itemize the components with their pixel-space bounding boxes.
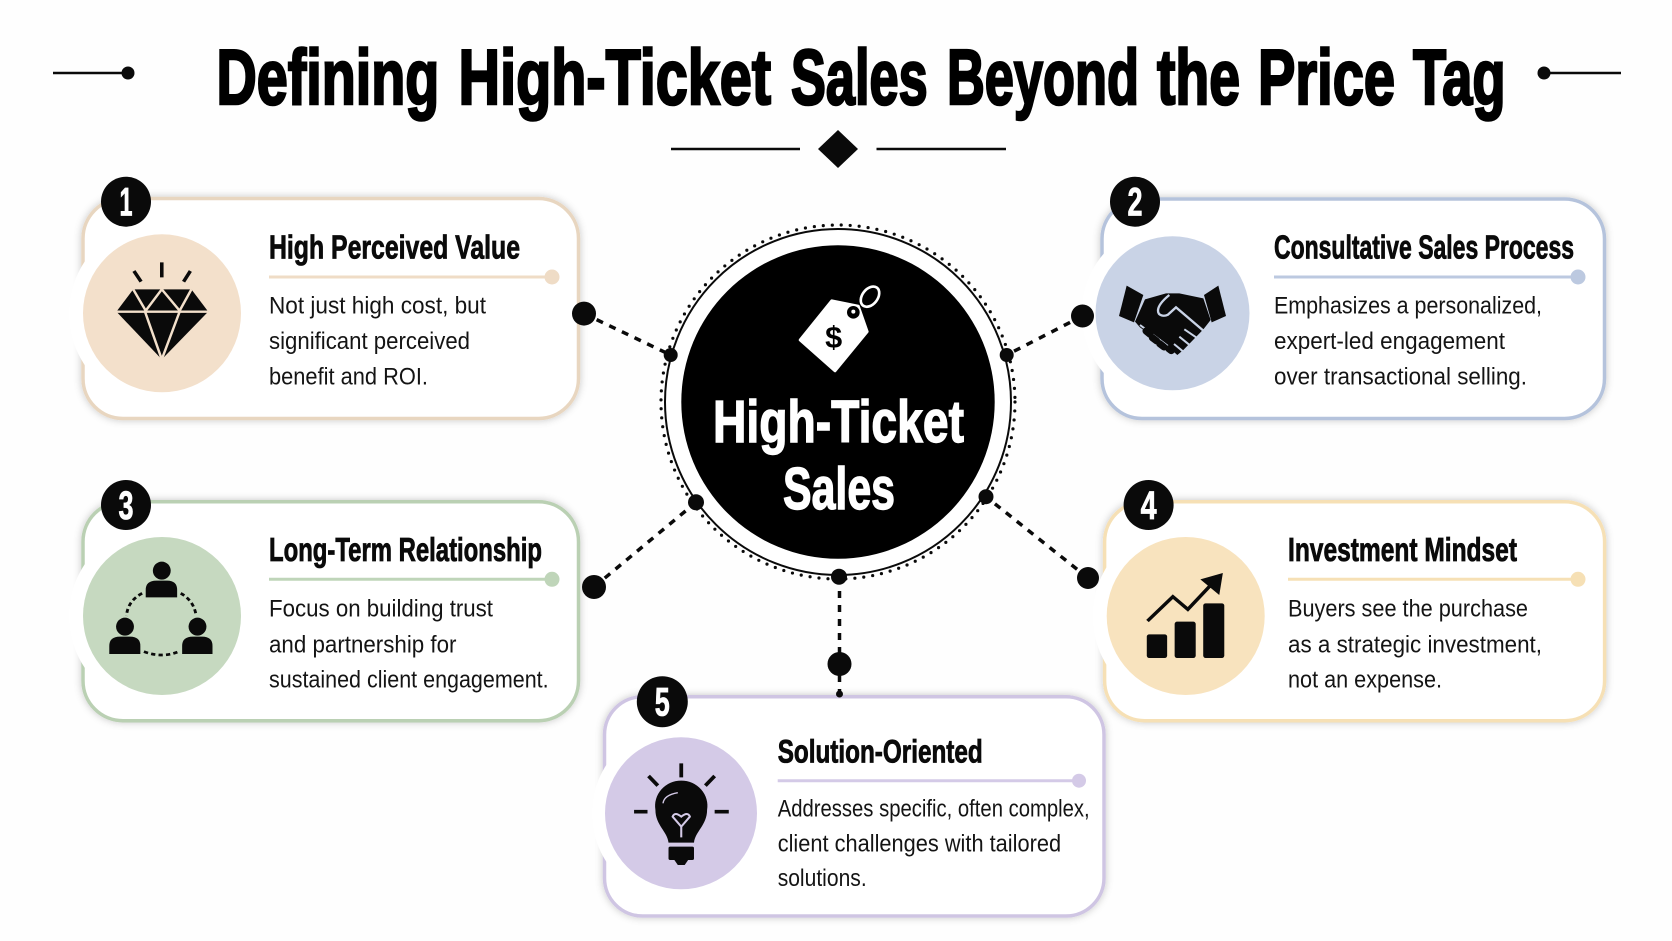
badge 3: 3: [118, 484, 134, 528]
icon: handshake: [1096, 236, 1250, 390]
text block: Addresses specific, often complex,: [778, 796, 1090, 823]
title divider with diamond: [671, 130, 1006, 168]
badge 2: 2: [1128, 180, 1142, 224]
badge 3: [101, 480, 151, 530]
text block: and partnership for: [269, 631, 456, 658]
rule: [1288, 572, 1586, 587]
connector: card 4: [986, 497, 1099, 589]
title: Defining: [216, 33, 439, 121]
text block: significant perceived: [269, 328, 470, 355]
hub label: Sales: [783, 456, 895, 522]
text block: sustained client engagement.: [269, 666, 549, 693]
connector: card 1: [572, 302, 671, 355]
hub nodes: [664, 348, 1014, 585]
text block: [1274, 292, 1542, 390]
panel: high perceived value: [69, 177, 578, 418]
text block: Buyers see the purchase: [1288, 596, 1528, 623]
title: the: [1157, 33, 1240, 121]
badge 1: 1: [120, 180, 132, 224]
badge 5: 5: [655, 681, 670, 725]
panel: solution-oriented: [592, 676, 1104, 916]
text block: solutions.: [778, 865, 867, 892]
badge 1: [101, 177, 151, 227]
badge 2: [1110, 177, 1160, 227]
title: Price: [1258, 33, 1395, 121]
icon: people network: [83, 537, 241, 695]
rule: [269, 270, 560, 284]
text block: Not just high cost, but: [269, 292, 486, 319]
rule: [778, 774, 1086, 788]
title: Sales: [791, 33, 928, 121]
hub label: High-Ticket: [713, 389, 964, 455]
text block: expert-led engagement: [1274, 328, 1505, 355]
heading: Long-Term Relationship: [269, 531, 542, 568]
badge 4: 4: [1141, 484, 1157, 528]
title: Tag: [1413, 33, 1506, 121]
center hub: [661, 225, 1015, 585]
connector: card 2: [1007, 304, 1094, 355]
heading: Solution-Oriented: [778, 734, 983, 770]
heading: High Perceived Value: [269, 228, 520, 265]
title ornament: left: [53, 66, 134, 80]
icon: light bulb: [605, 737, 757, 889]
icon: diamond: [83, 234, 241, 392]
badge 5: [637, 676, 688, 727]
rule: [1274, 270, 1586, 284]
rule: [269, 572, 560, 587]
text block: over transactional selling.: [1274, 363, 1527, 390]
title ornament: right: [1538, 66, 1621, 80]
text block: as a strategic investment,: [1288, 631, 1542, 658]
text block: benefit and ROI.: [269, 363, 428, 390]
text block: Focus on building trust: [269, 596, 493, 623]
text block: [778, 796, 1090, 892]
text block: client challenges with tailored: [778, 831, 1061, 858]
connector: card 3: [582, 502, 696, 599]
icon: price tag: $: [825, 320, 842, 354]
hub label: [713, 389, 964, 522]
text block: not an expense.: [1288, 666, 1442, 693]
icon: rising chart: [1107, 537, 1265, 695]
title: High-Ticket: [458, 33, 771, 121]
panel: consultative sales process: [1082, 177, 1604, 418]
text block: [269, 596, 549, 693]
text block: [1288, 596, 1542, 693]
text block: Emphasizes a personalized,: [1274, 292, 1542, 319]
panel: investment mindset: [1093, 480, 1605, 721]
text block: [269, 292, 486, 390]
title: Beyond: [947, 33, 1139, 121]
heading: Investment Mindset: [1288, 531, 1517, 568]
connector: card 5: [828, 577, 852, 698]
icon: price tag: [800, 283, 883, 371]
panel: long-term relationship: [69, 480, 578, 721]
badge 4: [1124, 480, 1174, 530]
